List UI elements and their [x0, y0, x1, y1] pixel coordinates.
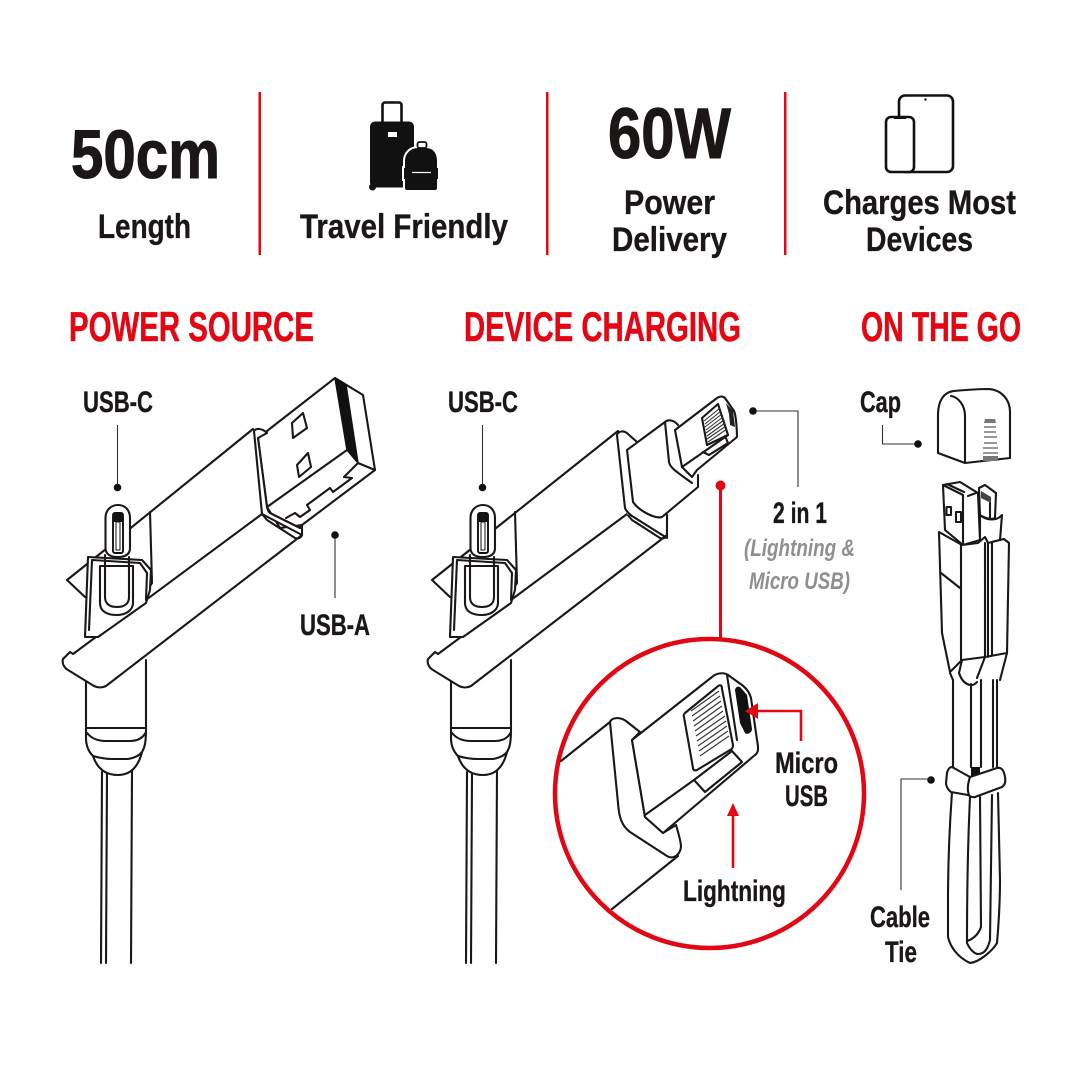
- label: cable tie: Cable: [870, 901, 930, 934]
- lightning tip: [675, 396, 737, 477]
- illustration: power source cable with USB-A and USB-C: [63, 378, 375, 963]
- cable loop: [948, 792, 1000, 963]
- callout: magnified connector: USB: [785, 780, 828, 813]
- cable neck and strands: [451, 660, 511, 963]
- main housing: [106, 429, 253, 548]
- label: 2 in 1: (Lightning &: [744, 535, 855, 562]
- rear panel and triangle: [432, 512, 517, 600]
- label: USB-C source: [83, 386, 153, 491]
- label: cap: [860, 386, 922, 448]
- label: 2 in 1: Micro USB): [749, 568, 850, 595]
- label: USB-A: [300, 531, 370, 642]
- middle collar: [627, 420, 698, 517]
- arrow: lightning: [727, 803, 739, 868]
- stat: charges most devices: Charges Most: [823, 184, 1016, 222]
- label: USB-C source: USB-C: [83, 386, 153, 419]
- label: cable tie: Tie: [885, 936, 917, 969]
- icon: phone and tablet: [886, 96, 953, 172]
- stat: 50cm length: Length: [98, 208, 191, 246]
- USB-C connector block: [85, 505, 151, 637]
- callout: magnified connector: [555, 639, 864, 948]
- callout connector: [716, 480, 726, 640]
- stat: 60W power delivery: [608, 95, 731, 259]
- label: 2 in 1: [744, 407, 855, 595]
- icon: luggage and backpack: [369, 102, 439, 191]
- cable tie band: [946, 767, 1005, 797]
- stat: 50cm length: [71, 116, 220, 246]
- stat: 60W power delivery: Delivery: [612, 221, 727, 259]
- callout: magnified connector: Lightning: [683, 875, 786, 908]
- stat: 60W power delivery: 60W: [608, 95, 731, 174]
- stat: travel friendly: Travel Friendly: [300, 208, 508, 246]
- label: 2 in 1: 2 in 1: [773, 497, 827, 530]
- label: USB-C device side: USB-C: [448, 386, 518, 419]
- heading: device charging: DEVICE CHARGING: [464, 303, 741, 350]
- stat: 50cm length: 50cm: [71, 116, 220, 193]
- label: cable tie: [870, 776, 935, 969]
- illustration: device charging cable with lightning tip: [428, 396, 737, 963]
- housing collar: [617, 431, 690, 538]
- label: cap: Cap: [860, 386, 901, 419]
- magnified lightning and micro USB tip: [632, 673, 758, 833]
- label: USB-A: USB-A: [300, 609, 370, 642]
- USB-A plug: [258, 378, 375, 528]
- stat: charges most devices: [823, 96, 1016, 259]
- stat: charges most devices: Devices: [866, 221, 973, 259]
- illustration: cap: [938, 389, 1010, 463]
- stat: 60W power delivery: Power: [624, 184, 715, 222]
- illustration: folded cable with tie: [939, 482, 1009, 963]
- rear panel and triangle: [67, 512, 152, 600]
- heading: power source: POWER SOURCE: [69, 303, 314, 350]
- main housing: [471, 431, 618, 548]
- magnified housing: [561, 718, 681, 909]
- USB-A collar: [254, 429, 302, 535]
- callout: magnified connector: Micro: [775, 747, 838, 780]
- label: USB-C device side: [448, 386, 518, 491]
- cable neck and strands: [86, 660, 146, 963]
- stat: travel friendly: [300, 102, 508, 246]
- folded housing: [939, 532, 1009, 680]
- USB-C connector block: [450, 505, 516, 637]
- upper cable: [953, 673, 997, 768]
- tips: [943, 482, 1002, 545]
- arrow: micro USB: [745, 703, 801, 741]
